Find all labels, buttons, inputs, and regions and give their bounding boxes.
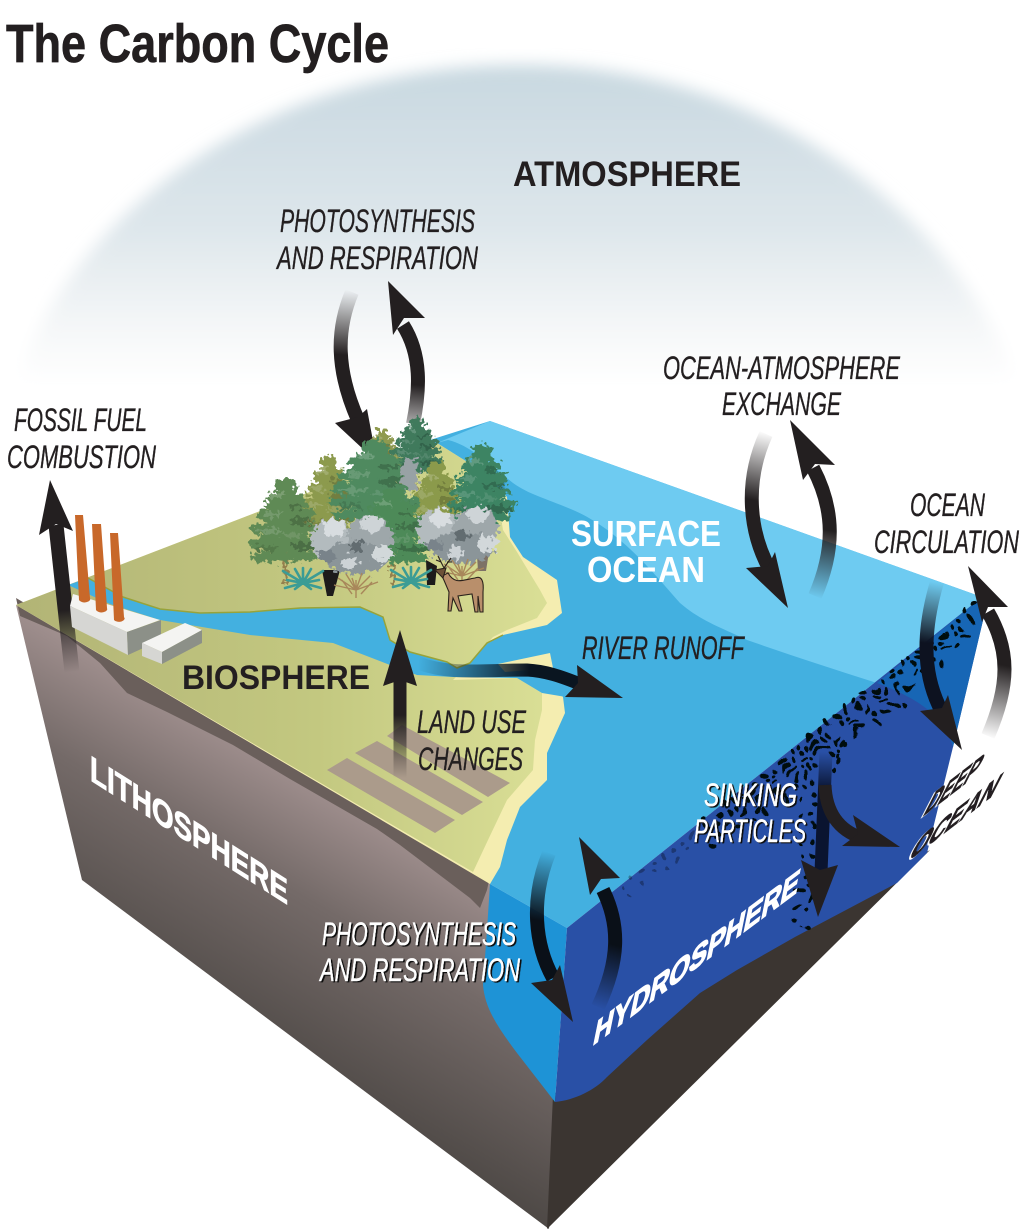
label: surface ocean (571, 513, 721, 590)
label: photosynthesis and respiration (upper) (276, 203, 479, 276)
grey tree on back (401, 457, 419, 493)
icon: deer (435, 556, 483, 612)
label: fossil fuel combustion (7, 402, 157, 475)
label: photosynthesis and respiration (lower): PHOTOSYNTHESIS (322, 916, 516, 952)
arrow: fossil fuel combustion (39, 480, 73, 672)
label: biosphere: BIOSPHERE (182, 659, 370, 697)
label: land use changes (417, 704, 526, 777)
trunks of grey trees (322, 540, 490, 596)
label: ocean circulation (874, 487, 1020, 560)
label: surface ocean: SURFACE (571, 513, 721, 554)
panel: hydrosphere ocean (430, 421, 985, 1102)
rock: left face (16, 605, 556, 1229)
ferns and shrubs (283, 559, 484, 598)
rock: right face (547, 850, 930, 1229)
label: photosynthesis and respiration (upper): PHOTOSYNTHESIS (280, 203, 475, 239)
river bank line (88, 578, 503, 668)
label: surface ocean: OCEAN (587, 549, 705, 590)
arrow: biomass to ocean (lower) (579, 837, 620, 1007)
title: The Carbon Cycle (6, 14, 389, 74)
label: sinking particles (694, 777, 806, 849)
ocean: coastal front face (483, 884, 567, 1102)
grey bushes (311, 506, 499, 574)
label: land use changes: LAND USE (417, 704, 526, 740)
label: sinking particles: PARTICLES (694, 813, 806, 849)
land: grass surface (16, 443, 547, 872)
ocean: deep front face (555, 597, 985, 1102)
arrow: forest to atmosphere (388, 281, 425, 424)
label: ocean-atmosphere exchange: EXCHANGE (722, 386, 841, 422)
label: photosynthesis and respiration (lower) (319, 916, 521, 988)
back trees (300, 418, 516, 557)
label: lithosphere: LITHOSPHERE (90, 747, 288, 913)
river (68, 578, 566, 697)
label: fossil fuel combustion: COMBUSTION (7, 439, 157, 475)
label: ocean-atmosphere exchange: OCEAN-ATMOSPHERE (663, 350, 900, 386)
factory: chimneys (75, 515, 125, 622)
factory: main building (70, 594, 161, 655)
label: photosynthesis and respiration (lower): AND RESPIRATION (319, 952, 521, 988)
factory: small building (142, 623, 202, 664)
front pines (249, 478, 434, 584)
land: beach sand (16, 443, 565, 884)
arrow: atmosphere to forest (335, 292, 377, 462)
label: fossil fuel combustion: FOSSIL FUEL (14, 402, 147, 438)
label: photosynthesis and respiration (upper): AND RESPIRATION (276, 240, 479, 276)
arrow: river runoff (418, 663, 623, 698)
arrow: atmosphere to ocean (746, 434, 788, 608)
farm fields (327, 725, 510, 833)
rock: upper soil strip (16, 598, 490, 908)
panel: lithosphere rock block (16, 598, 930, 1229)
label: sinking particles: SINKING (704, 777, 797, 813)
panel: atmosphere dome (15, 65, 1020, 392)
land: sand islet at river mouth (498, 653, 553, 672)
illustration: forest (249, 418, 516, 612)
arrow: surface to deep ocean (920, 582, 962, 750)
arrow: ocean to biomass (lower) (531, 853, 573, 1022)
arrow: ocean to atmosphere (790, 420, 835, 596)
particles: sinking dots (620, 606, 978, 935)
label: river runoff: RIVER RUNOFF (582, 630, 746, 666)
icon: factory with smokestacks (70, 515, 202, 664)
panel: biosphere land (16, 443, 566, 884)
label: ocean-atmosphere exchange (663, 350, 900, 422)
label: hydrosphere: HYDROSPHERE (590, 860, 803, 1054)
ocean: upper layer on deep face (877, 597, 985, 747)
arrow: deep ocean upwelling (968, 566, 1008, 736)
label: atmosphere: ATMOSPHERE (513, 155, 741, 194)
arrow: particles sinking straight (801, 752, 838, 917)
ocean: shallow light band (437, 421, 982, 683)
ocean: main surface (430, 421, 982, 928)
arrow: particles to deep ocean (825, 785, 900, 847)
label: land use changes: CHANGES (418, 741, 523, 777)
arrow: land use changes (383, 630, 417, 778)
